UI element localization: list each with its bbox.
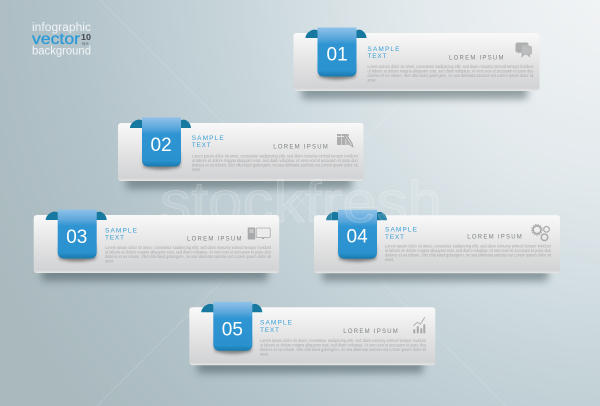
body text 03: ut labore et dolore magna aliquyam erat, sed diam voluptua. At vero eos et accusam et justo duo	[105, 250, 272, 254]
body text 04: amet.	[385, 257, 394, 262]
card 03	[34, 215, 279, 273]
ribbon 01	[306, 28, 366, 80]
heading 02	[192, 135, 224, 149]
card 01	[294, 33, 540, 91]
label 03: LOREM IPSUM	[187, 236, 242, 242]
ribbon 02	[130, 118, 191, 170]
label 01: LOREM IPSUM	[449, 55, 504, 61]
panel 04	[314, 210, 560, 281]
card 02	[118, 123, 364, 181]
body text 02: dolores et ea rebum. Stet clita kasd gubergren, no sea takimata sanctus est Lorem ipsum dolor sit	[192, 162, 359, 168]
body text 04	[385, 243, 552, 262]
body text 05: amet.	[260, 351, 269, 356]
logo: infographic vector background	[32, 22, 92, 58]
heading 03: SAMPLE	[105, 228, 138, 234]
body text 03: Lorem ipsum dolor sit amet, consetetur sadipscing elitr, sed diam nonumy eirmod tempor invidunt	[105, 245, 272, 250]
number 01: 01	[326, 44, 348, 66]
panel 05	[189, 302, 435, 373]
label 02: LOREM IPSUM	[273, 144, 328, 150]
body text 01: ut labore et dolore magna aliquyam erat, sed diam voluptua. At vero eos et accusam et justo duo	[368, 68, 534, 74]
logo: infographic vector background: vector	[32, 31, 81, 48]
card 05	[189, 307, 435, 365]
body text 02: ut labore et dolore magna aliquyam erat, sed diam voluptua. At vero eos et accusam et justo duo	[192, 158, 358, 163]
heading 04: SAMPLE	[385, 226, 418, 233]
ribbon 03	[46, 210, 107, 262]
body text 04: dolores et ea rebum. Stet clita kasd gubergren, no sea takimata sanctus est Lorem ipsum dolor sit	[385, 252, 552, 257]
logo: infographic vector background: infographic	[32, 22, 91, 34]
icon: computer	[248, 228, 270, 240]
body text 02	[192, 154, 359, 172]
heading 04	[385, 226, 418, 241]
body text 01	[368, 64, 534, 82]
heading 05: TEXT	[260, 327, 279, 334]
watermark: stockfresh: stockfresh	[160, 170, 442, 235]
heading 05: SAMPLE	[260, 319, 293, 326]
card 04	[314, 215, 560, 273]
heading 05	[260, 319, 293, 334]
ribbon 05	[201, 302, 262, 354]
body text 04: ut labore et dolore magna aliquyam erat, sed diam voluptua. At vero eos et accusam et justo duo	[385, 248, 552, 253]
heading 01: TEXT	[368, 53, 387, 60]
heading 01	[368, 46, 400, 60]
panel 02	[118, 118, 364, 189]
body text 05: dolores et ea rebum. Stet clita kasd gubergren, no sea takimata sanctus est Lorem ipsum dolor sit	[260, 347, 427, 352]
body text 04: Lorem ipsum dolor sit amet, consetetur sadipscing elitr, sed diam nonumy eirmod tempor invidunt	[385, 243, 552, 248]
icon: gears	[532, 224, 549, 241]
logo: infographic vector background: eps	[82, 40, 88, 46]
label 05: LOREM IPSUM	[343, 329, 398, 335]
body text 05	[260, 338, 427, 356]
body text 03: dolores et ea rebum. Stet clita kasd gubergren, no sea takimata sanctus est Lorem ipsum dolor sit	[105, 254, 272, 259]
body text 01: Lorem ipsum dolor sit amet, consetetur sadipscing elitr, sed diam nonumy eirmod tempor invidunt	[368, 64, 534, 69]
heading 04: TEXT	[385, 234, 404, 241]
body text 01: amet.	[368, 78, 376, 82]
heading 03: TEXT	[105, 234, 124, 242]
body text 05: Lorem ipsum dolor sit amet, consetetur sadipscing elitr, sed diam nonumy eirmod tempor invidunt	[260, 338, 427, 343]
diagonal watermark lines	[97, 0, 506, 406]
icon: rising chart	[413, 317, 425, 333]
panel 03	[34, 210, 279, 281]
heading 03	[105, 228, 138, 242]
logo: infographic vector background: 10	[81, 33, 92, 42]
heading 01: SAMPLE	[368, 46, 400, 53]
number 04: 04	[346, 226, 368, 247]
logo: infographic vector background: background	[32, 46, 91, 58]
body text 02: Lorem ipsum dolor sit amet, consetetur sadipscing elitr, sed diam nonumy eirmod tempor invidunt	[192, 154, 359, 158]
body text 05: ut labore et dolore magna aliquyam erat, sed diam voluptua. At vero eos et accusam et justo duo	[260, 342, 427, 347]
ribbon 04	[326, 210, 387, 262]
body text 03: amet.	[105, 258, 114, 264]
icon: speech bubbles	[516, 42, 532, 57]
number 02: 02	[150, 135, 172, 156]
icon: binders and pen	[337, 134, 353, 147]
heading 02: SAMPLE	[192, 135, 224, 142]
number 03: 03	[66, 227, 87, 248]
body text 03	[105, 245, 272, 264]
label 04: LOREM IPSUM	[467, 234, 522, 240]
panel 01	[294, 28, 540, 99]
body text 02: amet.	[192, 167, 201, 172]
body text 01: dolores et ea rebum. Stet clita kasd gubergren, no sea takimata sanctus est Lorem ipsum dolor sit	[368, 73, 534, 78]
heading 02: TEXT	[192, 142, 211, 149]
number 05: 05	[222, 319, 243, 340]
